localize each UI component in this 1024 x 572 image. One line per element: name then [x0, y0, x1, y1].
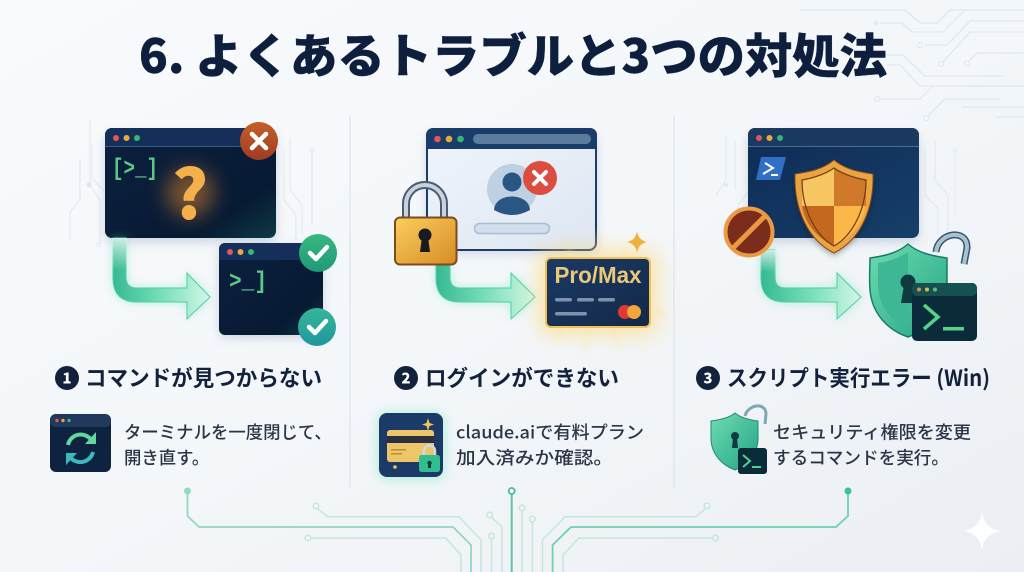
panel 2: cannot log in: [376, 128, 668, 481]
body text 2: claude.aiで有料プラン: [456, 420, 644, 444]
body text 3: セキュリティ権限を変更: [773, 420, 971, 444]
heading 3: 3: [703, 368, 713, 388]
illustration: terminal with question mark: [105, 128, 276, 242]
icon: prohibited sign: [726, 208, 772, 256]
illustration: Pro/Max card: [538, 232, 668, 352]
icon: credit card with lock: [376, 411, 446, 481]
heading 1: 1: [62, 368, 72, 388]
illustration: working terminal: [219, 243, 323, 338]
arrow: [436, 262, 535, 319]
heading 3: スクリプト実行エラー (Win): [727, 361, 990, 393]
panel 1: command not found: [50, 122, 337, 472]
illustration: terminal with question mark: ?: [172, 140, 208, 239]
body text 3: するコマンドを実行。: [773, 445, 949, 470]
faint side circuits: [70, 120, 957, 247]
heading 2: 2: [401, 368, 411, 388]
panel 3: script execution error: [696, 128, 990, 474]
illustration: login browser window: [426, 128, 597, 254]
illustration: working terminal: >_]: [229, 269, 267, 296]
icon: login error badge: [523, 161, 557, 195]
divider right: [674, 115, 675, 488]
body text 2: 加入済みか確認。: [456, 445, 613, 470]
divider left: [350, 115, 351, 488]
icon: check badge bottom: [298, 308, 336, 346]
illustration: PowerShell window with warning shield: [748, 128, 919, 242]
icon: error badge: [240, 122, 278, 160]
icon: padlock: [395, 185, 456, 264]
icon: green shield with open lock and terminal: [870, 235, 977, 341]
body text 1: ターミナルを一度閉じて、: [124, 420, 332, 444]
arrow: [760, 250, 861, 319]
body text 1: 開き直す。: [124, 445, 209, 470]
icon: check badge top: [299, 234, 337, 272]
title: 6. よくあるトラブルと3つの対処法: [139, 18, 887, 87]
heading 2: ログインができない: [425, 361, 619, 393]
illustration: Pro/Max card: Pro/Max: [554, 262, 642, 288]
arrow: [112, 238, 210, 319]
heading 1: コマンドが見つからない: [85, 361, 322, 393]
icon: corner sparkle: [964, 512, 1000, 550]
icon: refresh terminal: [50, 414, 111, 472]
illustration: terminal with question mark: [>_]: [112, 156, 158, 183]
icon: sparkle: [627, 231, 647, 253]
top-right circuit pattern: [800, 10, 1024, 120]
icon: shield with terminal: [711, 406, 767, 474]
bottom circuit: [184, 488, 852, 572]
icon: orange shield: [795, 160, 873, 256]
